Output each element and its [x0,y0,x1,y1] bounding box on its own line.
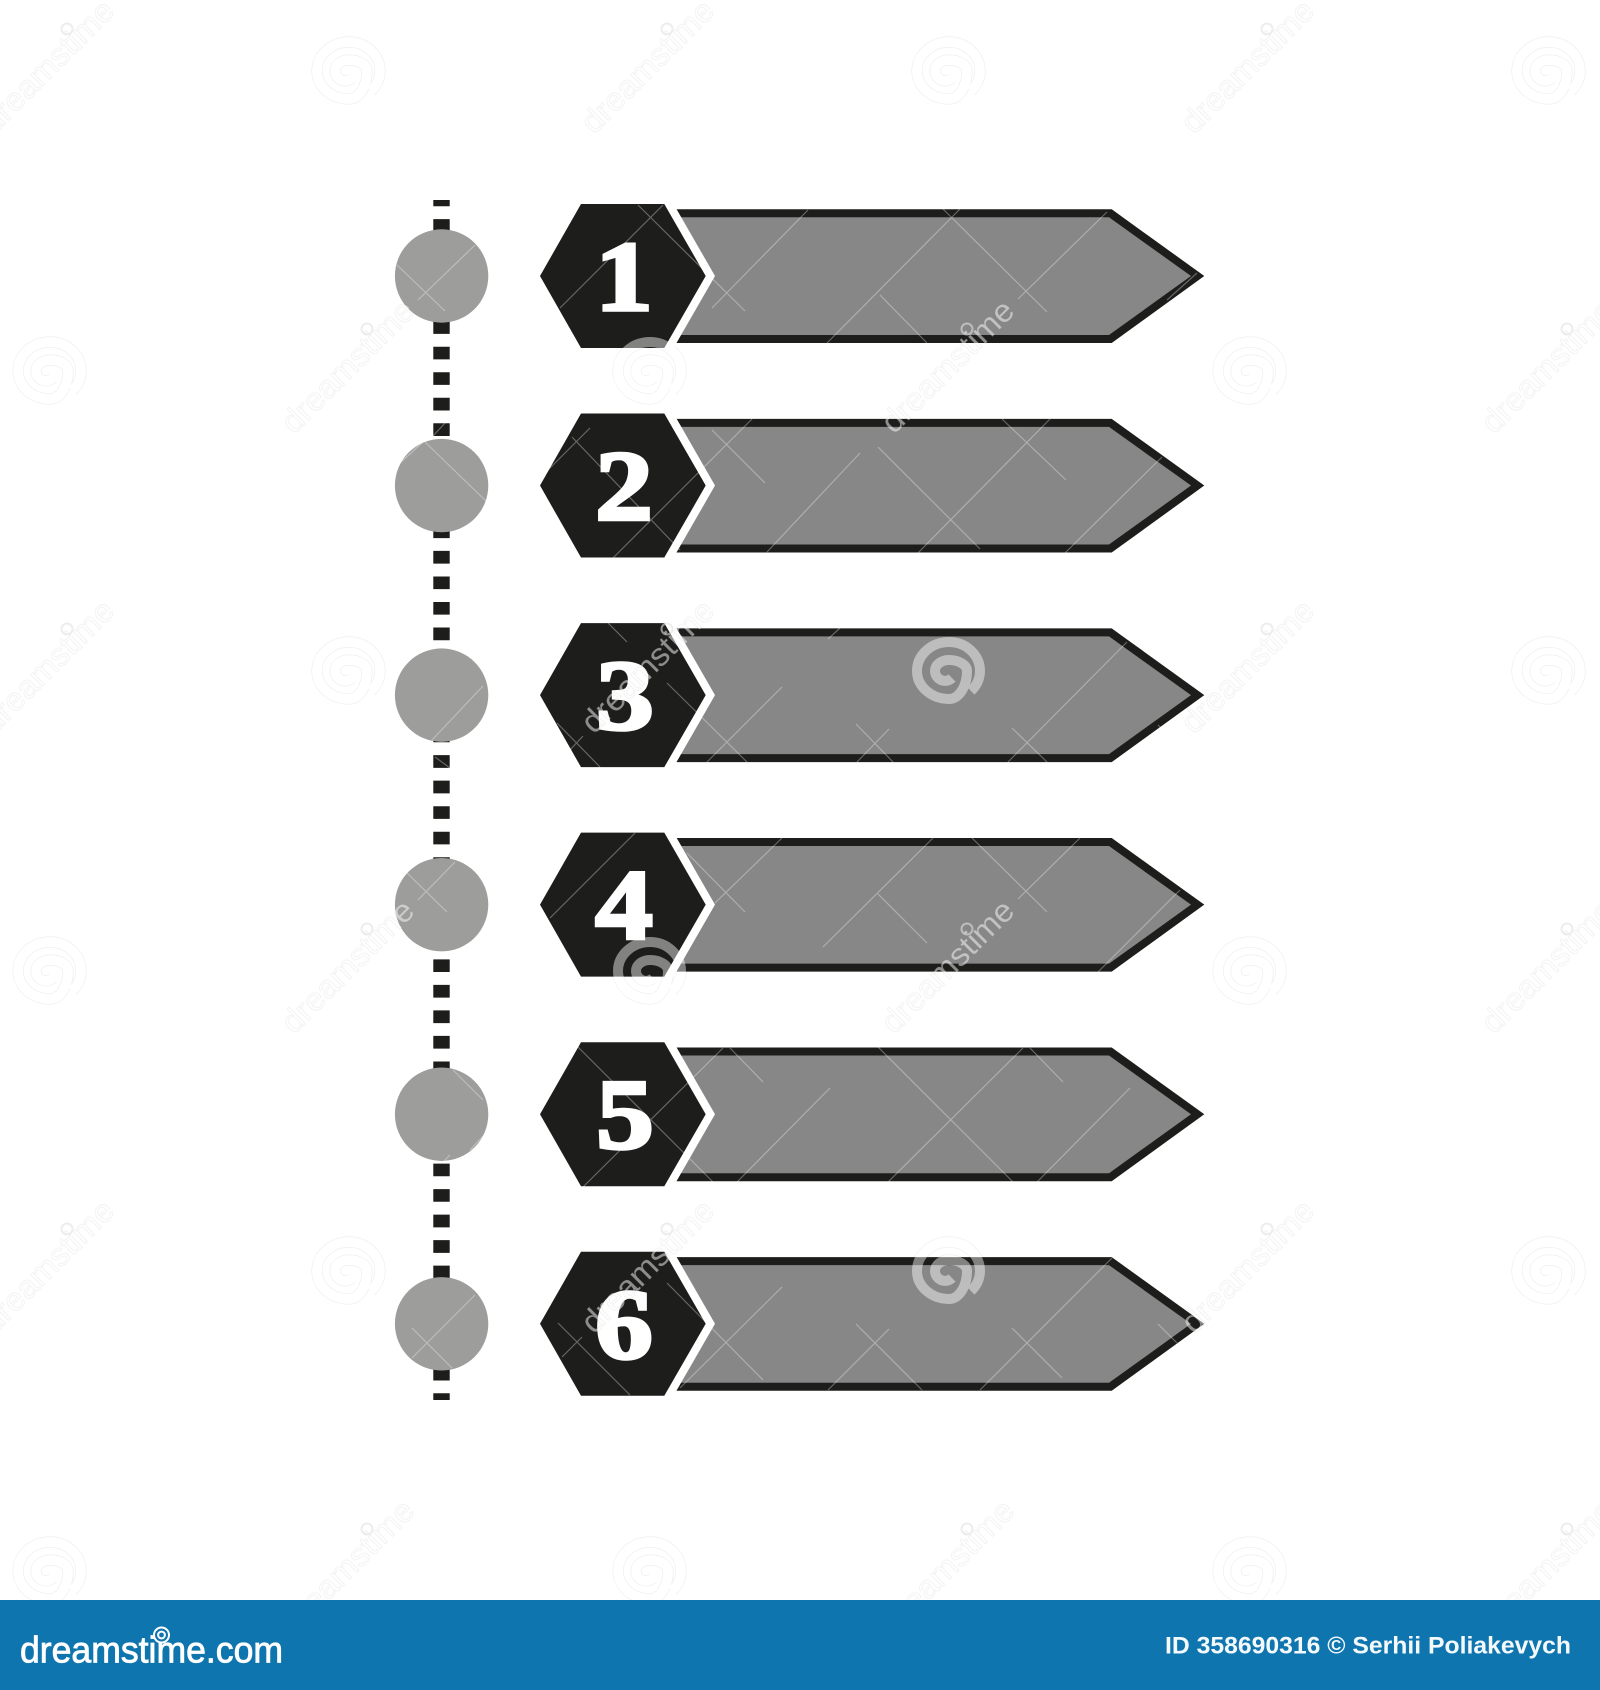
step 6 circle marker [395,1277,488,1370]
step 4 [395,833,1204,977]
image id and credit: ID 358690316 © Serhii Poliakevych [1165,1632,1571,1659]
diagonal watermark wordmarks: dreamstime [273,1492,421,1640]
step 1 circle marker [395,229,488,323]
step 6 number hexagon [540,1252,715,1396]
step 3 circle marker [395,648,488,742]
diagonal watermark wordmarks: dreamstime [1173,1192,1321,1340]
footer band [0,1600,1600,1690]
step 6 arrow banner [660,1257,1204,1391]
step 6 number: 6 [595,1270,653,1380]
step 5 number hexagon [540,1042,715,1186]
step 2 arrow banner [660,419,1204,553]
icon: logo spiral [154,1628,169,1642]
step 5 number: 5 [596,1060,654,1171]
watermark hairline crosses [397,205,1197,1395]
step 3 arrow banner [660,628,1204,762]
step 6 [395,1252,1204,1396]
diagonal watermark wordmarks: dreamstime [573,0,721,140]
footer logo wordmark: dreamstime.com [20,1630,283,1671]
watermark spirals over the artwork [618,342,980,1299]
step 1 number hexagon [540,204,715,348]
step 5 circle marker [395,1068,488,1161]
step 2 circle marker [395,439,488,532]
step 5 [395,1042,1204,1186]
dotted vertical timeline [433,200,450,1400]
diagonal watermark wordmarks: dreamstime [873,892,1021,1040]
diagonal watermark wordmarks: dreamstime [1173,592,1321,740]
step 3 [395,623,1204,767]
step 1 number: 1 [595,222,653,332]
step 2 [395,414,1204,558]
diagonal watermark wordmarks: dreamstime [1173,0,1321,140]
step 1 arrow banner [660,209,1204,343]
diagonal watermark wordmarks: dreamstime [573,592,721,740]
diagonal watermark wordmarks: dreamstime [873,1492,1021,1640]
diagonal watermark wordmarks: dreamstime [573,1192,721,1340]
step 2 number: 2 [595,431,653,542]
step 4 arrow banner [660,838,1204,972]
step 1 [395,204,1204,348]
step 3 number: 3 [596,641,654,751]
diagonal watermark wordmarks: dreamstime [273,892,421,1040]
diagonal watermark wordmarks: dreamstime [273,292,421,440]
step 5 arrow banner [660,1048,1204,1181]
step 3 number hexagon [540,623,715,767]
step 4 number: 4 [595,851,653,961]
step 4 circle marker [395,858,488,951]
step 4 number hexagon [540,833,715,977]
step 2 number hexagon [540,414,715,558]
diagonal watermark wordmarks: dreamstime [873,292,1021,440]
